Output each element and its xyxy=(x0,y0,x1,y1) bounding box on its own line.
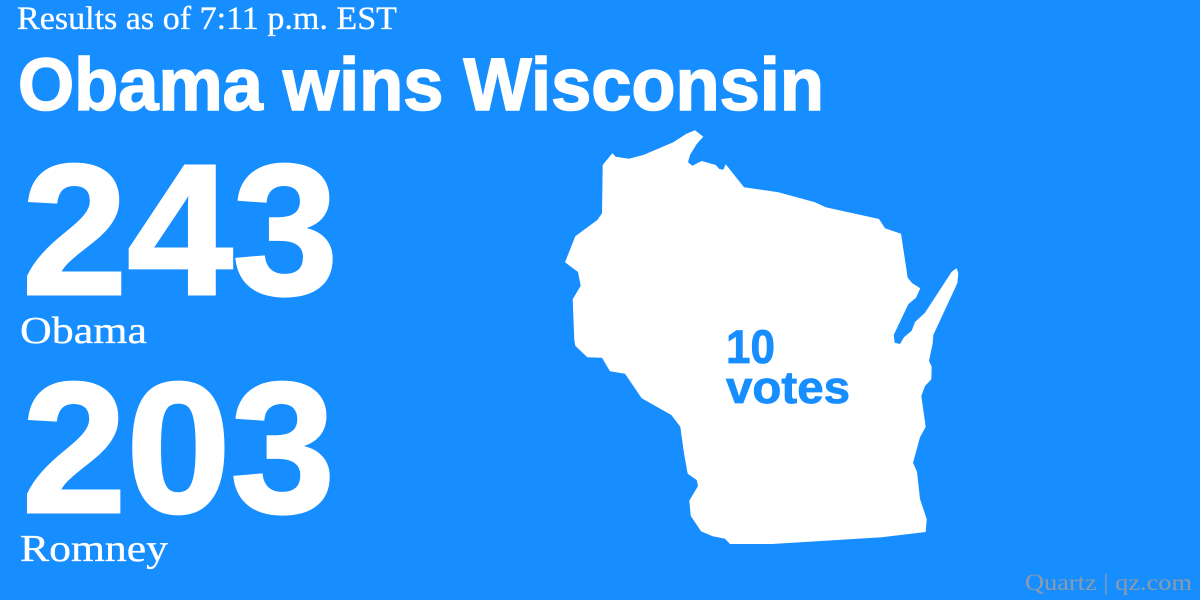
Romney label: Romney xyxy=(20,528,168,570)
votes label: votes xyxy=(726,362,850,413)
Obama electoral votes: 243 xyxy=(22,127,338,334)
votes count: 10 xyxy=(726,320,775,373)
credit: Quartz | qz.com xyxy=(1025,570,1192,595)
timestamp: Results as of 7:11 p.m. EST xyxy=(17,1,397,37)
Romney electoral votes: 203 xyxy=(22,345,335,552)
Obama label: Obama xyxy=(20,310,147,352)
map: Wisconsin xyxy=(565,130,958,544)
title: Obama wins Wisconsin xyxy=(18,43,824,126)
